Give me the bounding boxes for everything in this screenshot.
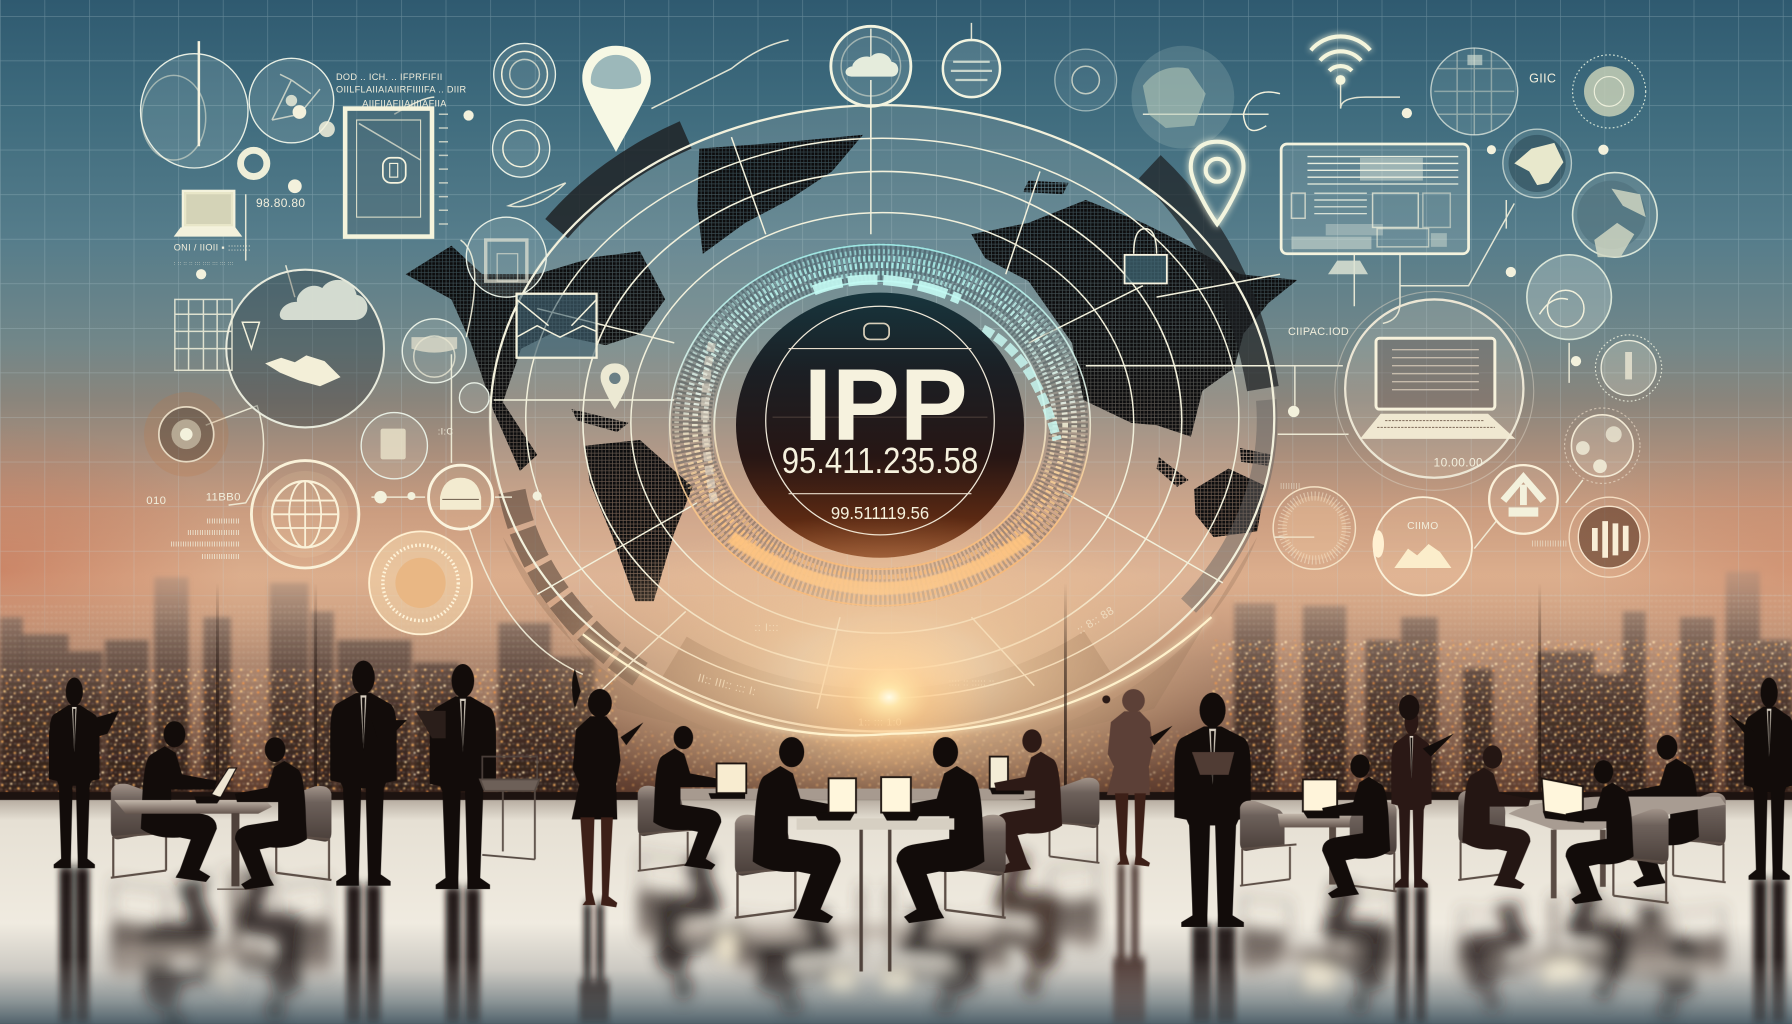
icon: hook ring bbox=[1243, 92, 1280, 131]
chair: front right bbox=[937, 815, 1006, 918]
person: standing man reading bbox=[330, 661, 407, 886]
icon: connector dot bbox=[463, 110, 474, 121]
text block: right: CIIPAC.IOD bbox=[1288, 326, 1349, 338]
person: seated left bbox=[1462, 745, 1530, 889]
icon: location pin small bbox=[601, 363, 629, 409]
scene: centre back table bbox=[638, 726, 1099, 873]
label: top right code: GIIC bbox=[1529, 71, 1556, 85]
icon: small node ring bbox=[459, 383, 489, 413]
icon: device ring bbox=[429, 465, 493, 529]
central ring: translucent backing bbox=[488, 104, 1277, 760]
chair: left bbox=[1458, 790, 1518, 880]
chair: front left bbox=[735, 815, 803, 918]
badge icon bbox=[864, 323, 889, 339]
floor reflections bbox=[59, 853, 1785, 1024]
icon: location pin ring bbox=[1191, 142, 1244, 224]
icon: ring device bbox=[361, 413, 427, 479]
icon: small ring 2 bbox=[493, 120, 550, 177]
background: sky gradient bbox=[0, 0, 1792, 800]
text block: under laptop: ONI / IIOII ▪ :::::::: bbox=[174, 242, 251, 252]
icon: connector dot top bbox=[1598, 145, 1609, 155]
chair: right bbox=[269, 786, 331, 880]
icon: lens top center bbox=[943, 40, 1000, 97]
title: IPP: IPP bbox=[804, 348, 968, 462]
icon: globe right 2 bbox=[1573, 173, 1657, 257]
floor bbox=[0, 800, 1792, 1024]
background: warm side glows bbox=[0, 423, 1792, 720]
text block: left: IIIIIIIIIIIIIIIIIIIIIIIIIIIII bbox=[170, 539, 240, 548]
text block: under laptop: : :: :: :: ::: :::: ::: ::: ::: bbox=[174, 261, 234, 267]
ring labels along lower arc: :: I::: bbox=[754, 622, 779, 634]
scene: centre front table bbox=[735, 737, 1006, 971]
text block: left: 11BB0 bbox=[206, 492, 241, 504]
label: laptop address: 10.00.00 bbox=[1434, 455, 1483, 469]
scene: left table group bbox=[111, 721, 331, 889]
ring labels along lower arc: :::: :: ::::: :: bbox=[949, 678, 995, 688]
icon: envelope card bbox=[517, 294, 597, 358]
window mullions bbox=[216, 583, 1541, 794]
label: address: 98.80.80 bbox=[256, 196, 305, 210]
icon: data glass sphere bbox=[466, 217, 546, 297]
person: front right bbox=[896, 737, 984, 923]
icon: radar eye bbox=[144, 392, 229, 477]
scene: left standing man with tablet bbox=[49, 678, 119, 868]
glow at ring bottom bbox=[535, 514, 1243, 834]
ring labels along lower arc: II:: III:: ::: I: bbox=[696, 672, 757, 698]
text block: left: 010 bbox=[146, 495, 166, 507]
ring labels along lower arc bbox=[696, 605, 1116, 729]
person: standing woman centre right bbox=[1391, 695, 1454, 887]
ring labels along lower arc: :: 8:: 88 bbox=[1075, 605, 1116, 637]
halftone rings around the core bbox=[670, 245, 1090, 606]
icon: connector dot right bbox=[1487, 145, 1496, 154]
person: standing woman with tablet bbox=[572, 669, 643, 907]
table legs bbox=[859, 830, 891, 971]
icon: big laptop bbox=[1335, 291, 1534, 490]
table top bbox=[797, 818, 954, 830]
back table top bbox=[640, 789, 1063, 800]
laptop bbox=[194, 768, 237, 803]
side table bbox=[480, 757, 539, 859]
icon: globe right 1 bbox=[1503, 129, 1571, 198]
laptop: back left bbox=[709, 763, 746, 799]
person: seated front bbox=[1566, 760, 1634, 904]
icon: ring right bbox=[1595, 335, 1662, 401]
person: back bbox=[1627, 735, 1699, 887]
person: tall standing man bbox=[1174, 693, 1251, 927]
chair: front bbox=[1606, 809, 1669, 903]
icon: cloud ring top center bbox=[831, 26, 911, 106]
laptop: right bbox=[881, 777, 921, 821]
icon: small laptop bbox=[174, 191, 242, 237]
icon: chart ring: CIIMO bbox=[1407, 521, 1439, 532]
world map: dotted continents bbox=[406, 135, 1297, 601]
city skyline bbox=[0, 571, 1792, 794]
icon: ring lens bbox=[402, 319, 466, 383]
table top bbox=[1509, 797, 1726, 830]
icon: earth face bbox=[1131, 46, 1234, 149]
central badge bbox=[736, 293, 1024, 558]
icon: small ring 1 bbox=[494, 43, 555, 105]
chair: back left bbox=[638, 786, 694, 871]
text block: left: IIIIIIIIIIIIIIIIIIIIII bbox=[187, 528, 240, 537]
icon: lens bbox=[1055, 49, 1117, 111]
icon: cloud sphere bbox=[1527, 255, 1611, 339]
text block: under laptop bbox=[174, 242, 251, 267]
icon: connector dot laptop bbox=[1288, 406, 1299, 417]
person: seated back left bbox=[653, 726, 721, 870]
ring labels along lower arc: 1:: ::: 1:0 bbox=[858, 718, 902, 729]
icon: house ring bbox=[1489, 465, 1558, 534]
scene: right large table bbox=[1458, 735, 1726, 904]
person: standing woman brown suit bbox=[1102, 689, 1173, 866]
laptop bbox=[1542, 778, 1584, 823]
icon: location pin large bbox=[582, 46, 651, 152]
label: right small text: IIIIIIIIIIIIII bbox=[1531, 539, 1567, 548]
icon: cloud globe bbox=[226, 270, 384, 427]
text block: top left: AIIFIIAFIIAIIIIAFIIA bbox=[362, 98, 447, 108]
icon: clip square on map bbox=[1125, 229, 1167, 283]
icon: connector dot sphere bbox=[1571, 356, 1581, 366]
laptop: back right bbox=[990, 757, 1024, 794]
chair: front bbox=[1337, 802, 1397, 891]
table pedestal bbox=[217, 814, 257, 889]
icon: node dot bbox=[288, 179, 302, 193]
icon: disc bbox=[1573, 55, 1646, 128]
icon: tablet bbox=[345, 109, 448, 237]
text block: top left bbox=[336, 72, 467, 108]
text block: left: IIIIIIIIIIIIII bbox=[206, 516, 240, 525]
text block: top left: DOD .. ICH. .. IFPRFIFII bbox=[336, 72, 443, 82]
address: secondary: 99.511119.56 bbox=[831, 503, 929, 523]
chair: left bbox=[111, 784, 173, 878]
outer ring: concentric arcs and spokes bbox=[490, 80, 1280, 731]
person: seated left bbox=[141, 721, 217, 882]
outer ring: dark arc bands bbox=[512, 135, 1267, 713]
icon: wifi bbox=[1311, 36, 1370, 83]
icon: grid chart bbox=[175, 299, 232, 370]
icon: wireframe sphere bbox=[141, 41, 248, 168]
icon: node dot ring bbox=[533, 491, 542, 501]
person: seated right bbox=[235, 737, 307, 889]
text block: left bbox=[146, 492, 241, 561]
background: grid bbox=[0, 0, 1792, 640]
table top bbox=[114, 800, 272, 814]
icon: ring token bbox=[241, 150, 267, 177]
icon: chart ring bbox=[1373, 497, 1472, 595]
table pedestal bbox=[1329, 827, 1336, 885]
icon: connector dot wifi bbox=[1402, 108, 1412, 118]
person: seated woman bbox=[1322, 754, 1390, 898]
person: standing man with clipboard bbox=[416, 664, 496, 889]
address: main: 95.411.235.58 bbox=[782, 440, 978, 481]
icon: ring map bbox=[1565, 408, 1640, 483]
icon: node dot cloud bbox=[196, 269, 206, 279]
icon: glowing coin bbox=[368, 530, 473, 635]
laptop bbox=[1303, 779, 1339, 818]
icon: monitor bbox=[1281, 144, 1469, 254]
text block: right bbox=[1280, 326, 1349, 491]
text block: right: IIIIIIII bbox=[1280, 482, 1301, 491]
icon: mesh sphere bbox=[1273, 487, 1355, 569]
chair: back bbox=[1240, 801, 1296, 886]
icon: data sphere bbox=[1431, 48, 1518, 135]
scene: right small table bbox=[1240, 754, 1397, 898]
icon: connector dot monitor bbox=[1506, 267, 1516, 277]
icon: globe bbox=[251, 461, 359, 568]
chair: back right bbox=[1043, 778, 1099, 863]
label: small code: :I:C bbox=[438, 426, 453, 436]
icon: bars ring bbox=[1569, 497, 1649, 577]
connector lines bbox=[206, 23, 1583, 674]
table pedestal bbox=[1551, 830, 1606, 898]
text block: left: IIIIIIIIIIIIIIII bbox=[202, 552, 240, 561]
icon: connector dots bbox=[374, 491, 415, 503]
person: front left bbox=[753, 737, 841, 923]
person: standing man far right bbox=[1729, 678, 1792, 880]
laptop: left bbox=[814, 778, 856, 821]
chair: back right bbox=[1666, 793, 1726, 882]
table top bbox=[1278, 814, 1360, 827]
text block: top left: OIILFLAIIAIAIIRFIIIIFA .. DIIR bbox=[336, 85, 467, 95]
bright lower rim bbox=[583, 617, 1211, 735]
window base strip bbox=[0, 792, 1792, 800]
person: seated back right bbox=[994, 729, 1062, 873]
icon: node globe bbox=[249, 58, 335, 143]
icon: monitor stand bbox=[1328, 261, 1368, 274]
